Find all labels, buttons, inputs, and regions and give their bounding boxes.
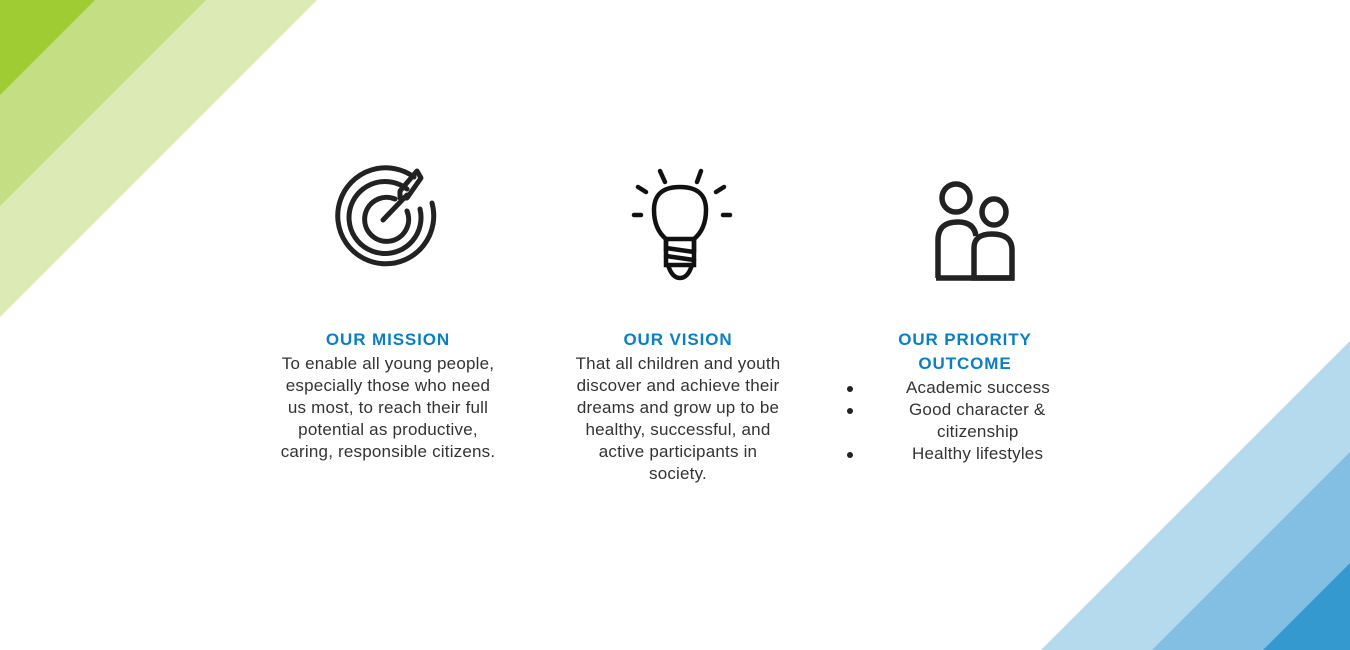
text: mission: us most, to reach their full <box>288 398 488 417</box>
heading: priority outcome <box>898 330 1032 373</box>
heading: our mission: OUR MISSION <box>326 330 450 349</box>
text: vision: society. <box>649 464 707 483</box>
text: mission <box>281 354 495 461</box>
text: vision: dreams and grow up to be <box>577 398 779 417</box>
text: mission: caring, responsible citizens. <box>281 442 495 461</box>
text: vision: healthy, successful, and <box>586 420 770 439</box>
icon: light bulb <box>632 168 732 280</box>
decorative green corner <box>0 0 317 317</box>
heading: our vision: OUR VISION <box>623 330 733 349</box>
list: outcomes: Academic success <box>906 378 1050 397</box>
panel: mission <box>281 330 495 461</box>
heading: priority outcome: OUR PRIORITY <box>898 330 1032 349</box>
heading: priority outcome: OUTCOME <box>918 354 1012 373</box>
text: vision: That all children and youth <box>576 354 780 373</box>
text: mission: especially those who need <box>286 376 490 395</box>
list: outcomes: Good character & <box>909 400 1045 419</box>
list: outcomes <box>847 378 1050 463</box>
icon: people <box>935 181 1015 281</box>
text: vision: active participants in <box>599 442 757 461</box>
icon: target <box>335 165 436 266</box>
text: mission: potential as productive, <box>298 420 478 439</box>
list: outcomes: Healthy lifestyles <box>912 444 1043 463</box>
text: mission: To enable all young people, <box>282 354 494 373</box>
text: vision <box>576 354 780 483</box>
list: outcomes: citizenship <box>937 422 1019 441</box>
panel: priority outcome <box>847 330 1050 463</box>
decorative blue corner <box>1041 341 1350 650</box>
panel: vision <box>576 330 780 483</box>
text: vision: discover and achieve their <box>577 376 779 395</box>
